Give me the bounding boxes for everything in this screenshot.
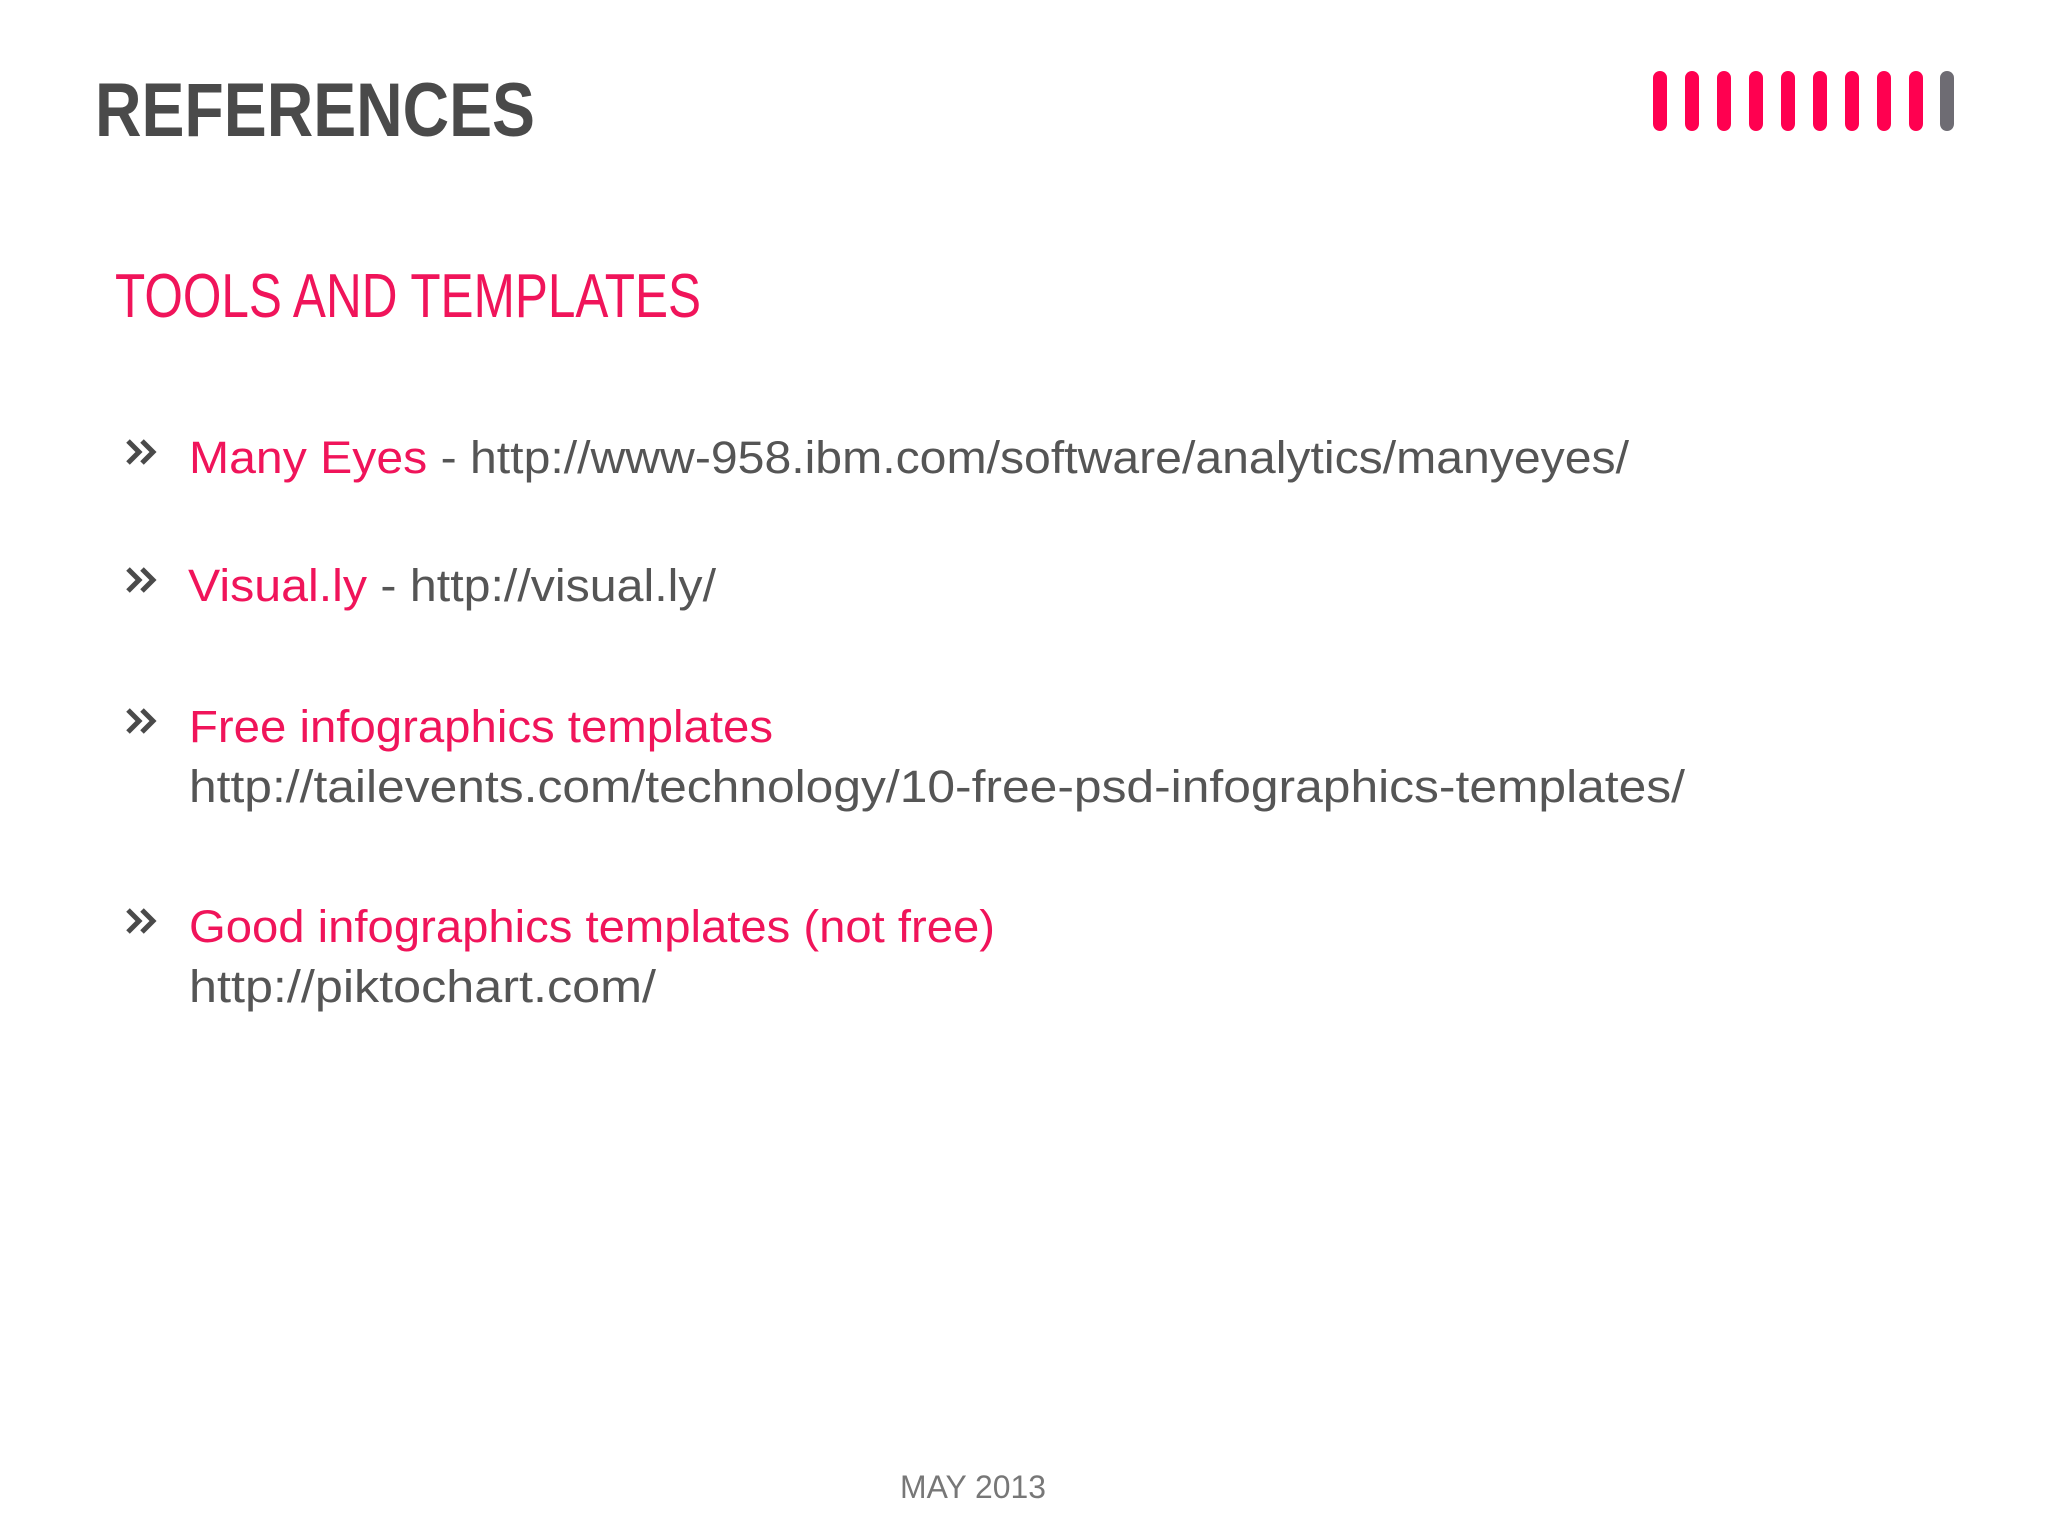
item 3 <box>128 701 1686 812</box>
progress bars icon <box>1653 71 1954 131</box>
item 3: Free infographics templates <box>189 701 773 752</box>
footer date: MAY 2013 <box>900 1469 1046 1505</box>
icon: chevron <box>128 910 153 932</box>
item 4 <box>128 901 995 1012</box>
item 1: Many Eyes - http://www-958.ibm.com/software/analytics/manyeyes/ <box>189 432 1630 483</box>
item 4: http://piktochart.com/ <box>189 961 657 1012</box>
item 3: http://tailevents.com/technology/10-free-psd-infographics-templates/ <box>189 761 1686 812</box>
icon: chevron <box>128 569 153 591</box>
title: REFERENCES <box>95 68 535 153</box>
item 2: Visual.ly - http://visual.ly/ <box>188 560 717 611</box>
item 4: Good infographics templates (not free) <box>189 901 995 952</box>
icon: chevron <box>128 710 153 732</box>
section heading: TOOLS AND TEMPLATES <box>115 262 701 331</box>
icon: chevron <box>128 441 153 463</box>
